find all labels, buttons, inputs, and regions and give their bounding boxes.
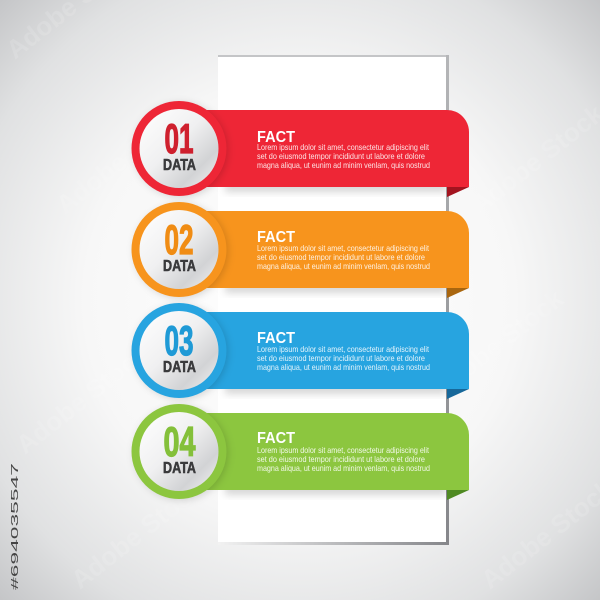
fact text: magna aliqua, ut eunim ad minim venlam, quis nostrud (257, 262, 430, 271)
number badge: 03 (164, 317, 194, 364)
number badge (132, 303, 228, 399)
ribbon shadow (225, 382, 447, 394)
fact text: set do eiusmod tempor incididunt ut labore et dolore (257, 354, 425, 363)
paper sheet (218, 55, 449, 545)
fact text (257, 430, 430, 473)
number badge: 01 (164, 115, 194, 162)
number badge: 04 (164, 418, 196, 465)
ribbon (205, 312, 469, 389)
fact text: Lorem ipsum dolor sit amet, consectetur adipiscing elit (257, 345, 430, 354)
fact text: Lorem ipsum dolor sit amet, consectetur adipiscing elit (257, 143, 430, 152)
watermark: Adobe Stock (65, 473, 209, 595)
number badge: DATA (163, 359, 196, 376)
fact text: set do eiusmod tempor incididunt ut labore et dolore (257, 253, 425, 262)
ribbon (205, 413, 469, 490)
ribbon fold (447, 288, 469, 298)
fact text: magna aliqua, ut eunim ad minim venlam, quis nostrud (257, 464, 430, 473)
ribbon fold (447, 490, 469, 500)
row 1: red (132, 101, 469, 197)
fact text: FACT (257, 330, 295, 347)
number badge: DATA (163, 460, 196, 477)
row 3: blue (132, 303, 469, 399)
watermark: Adobe Stock (425, 283, 569, 405)
ribbon (205, 211, 469, 288)
number badge (132, 202, 228, 298)
number badge: DATA (163, 258, 196, 275)
fact text: FACT (257, 229, 295, 246)
row 4: green (132, 404, 469, 500)
number badge (132, 404, 228, 500)
fact text: FACT (257, 430, 295, 447)
number badge: DATA (163, 157, 196, 174)
stock id text: #694035547 (9, 463, 21, 590)
fact text (257, 229, 430, 271)
watermark: Adobe Stock (10, 338, 154, 460)
fact text: Lorem ipsum dolor sit amet, consectetur adipiscing elit (257, 244, 430, 253)
fact text: magna aliqua, ut eunim ad minim venlam, quis nostrud (257, 363, 430, 372)
fact text: magna aliqua, ut eunim ad minim venlam, quis nostrud (257, 161, 430, 170)
ribbon shadow (225, 281, 447, 293)
watermark: Adobe Stock (50, 98, 194, 220)
number badge (132, 101, 228, 197)
ribbon (205, 110, 469, 187)
fact text: set do eiusmod tempor incididunt ut labore et dolore (257, 152, 425, 161)
row 2: orange (132, 202, 469, 298)
fact text: set do eiusmod tempor incididunt ut labore et dolore (257, 455, 425, 464)
ribbon fold (447, 187, 469, 197)
ribbon fold (447, 389, 469, 399)
fact text (257, 330, 430, 372)
ribbon shadow (225, 483, 447, 495)
fact text (257, 129, 430, 170)
fact text: Lorem ipsum dolor sit amet, consectetur adipiscing elit (257, 446, 430, 455)
number badge: 02 (164, 216, 194, 263)
ribbon shadow (225, 180, 447, 192)
fact text: FACT (257, 129, 295, 146)
